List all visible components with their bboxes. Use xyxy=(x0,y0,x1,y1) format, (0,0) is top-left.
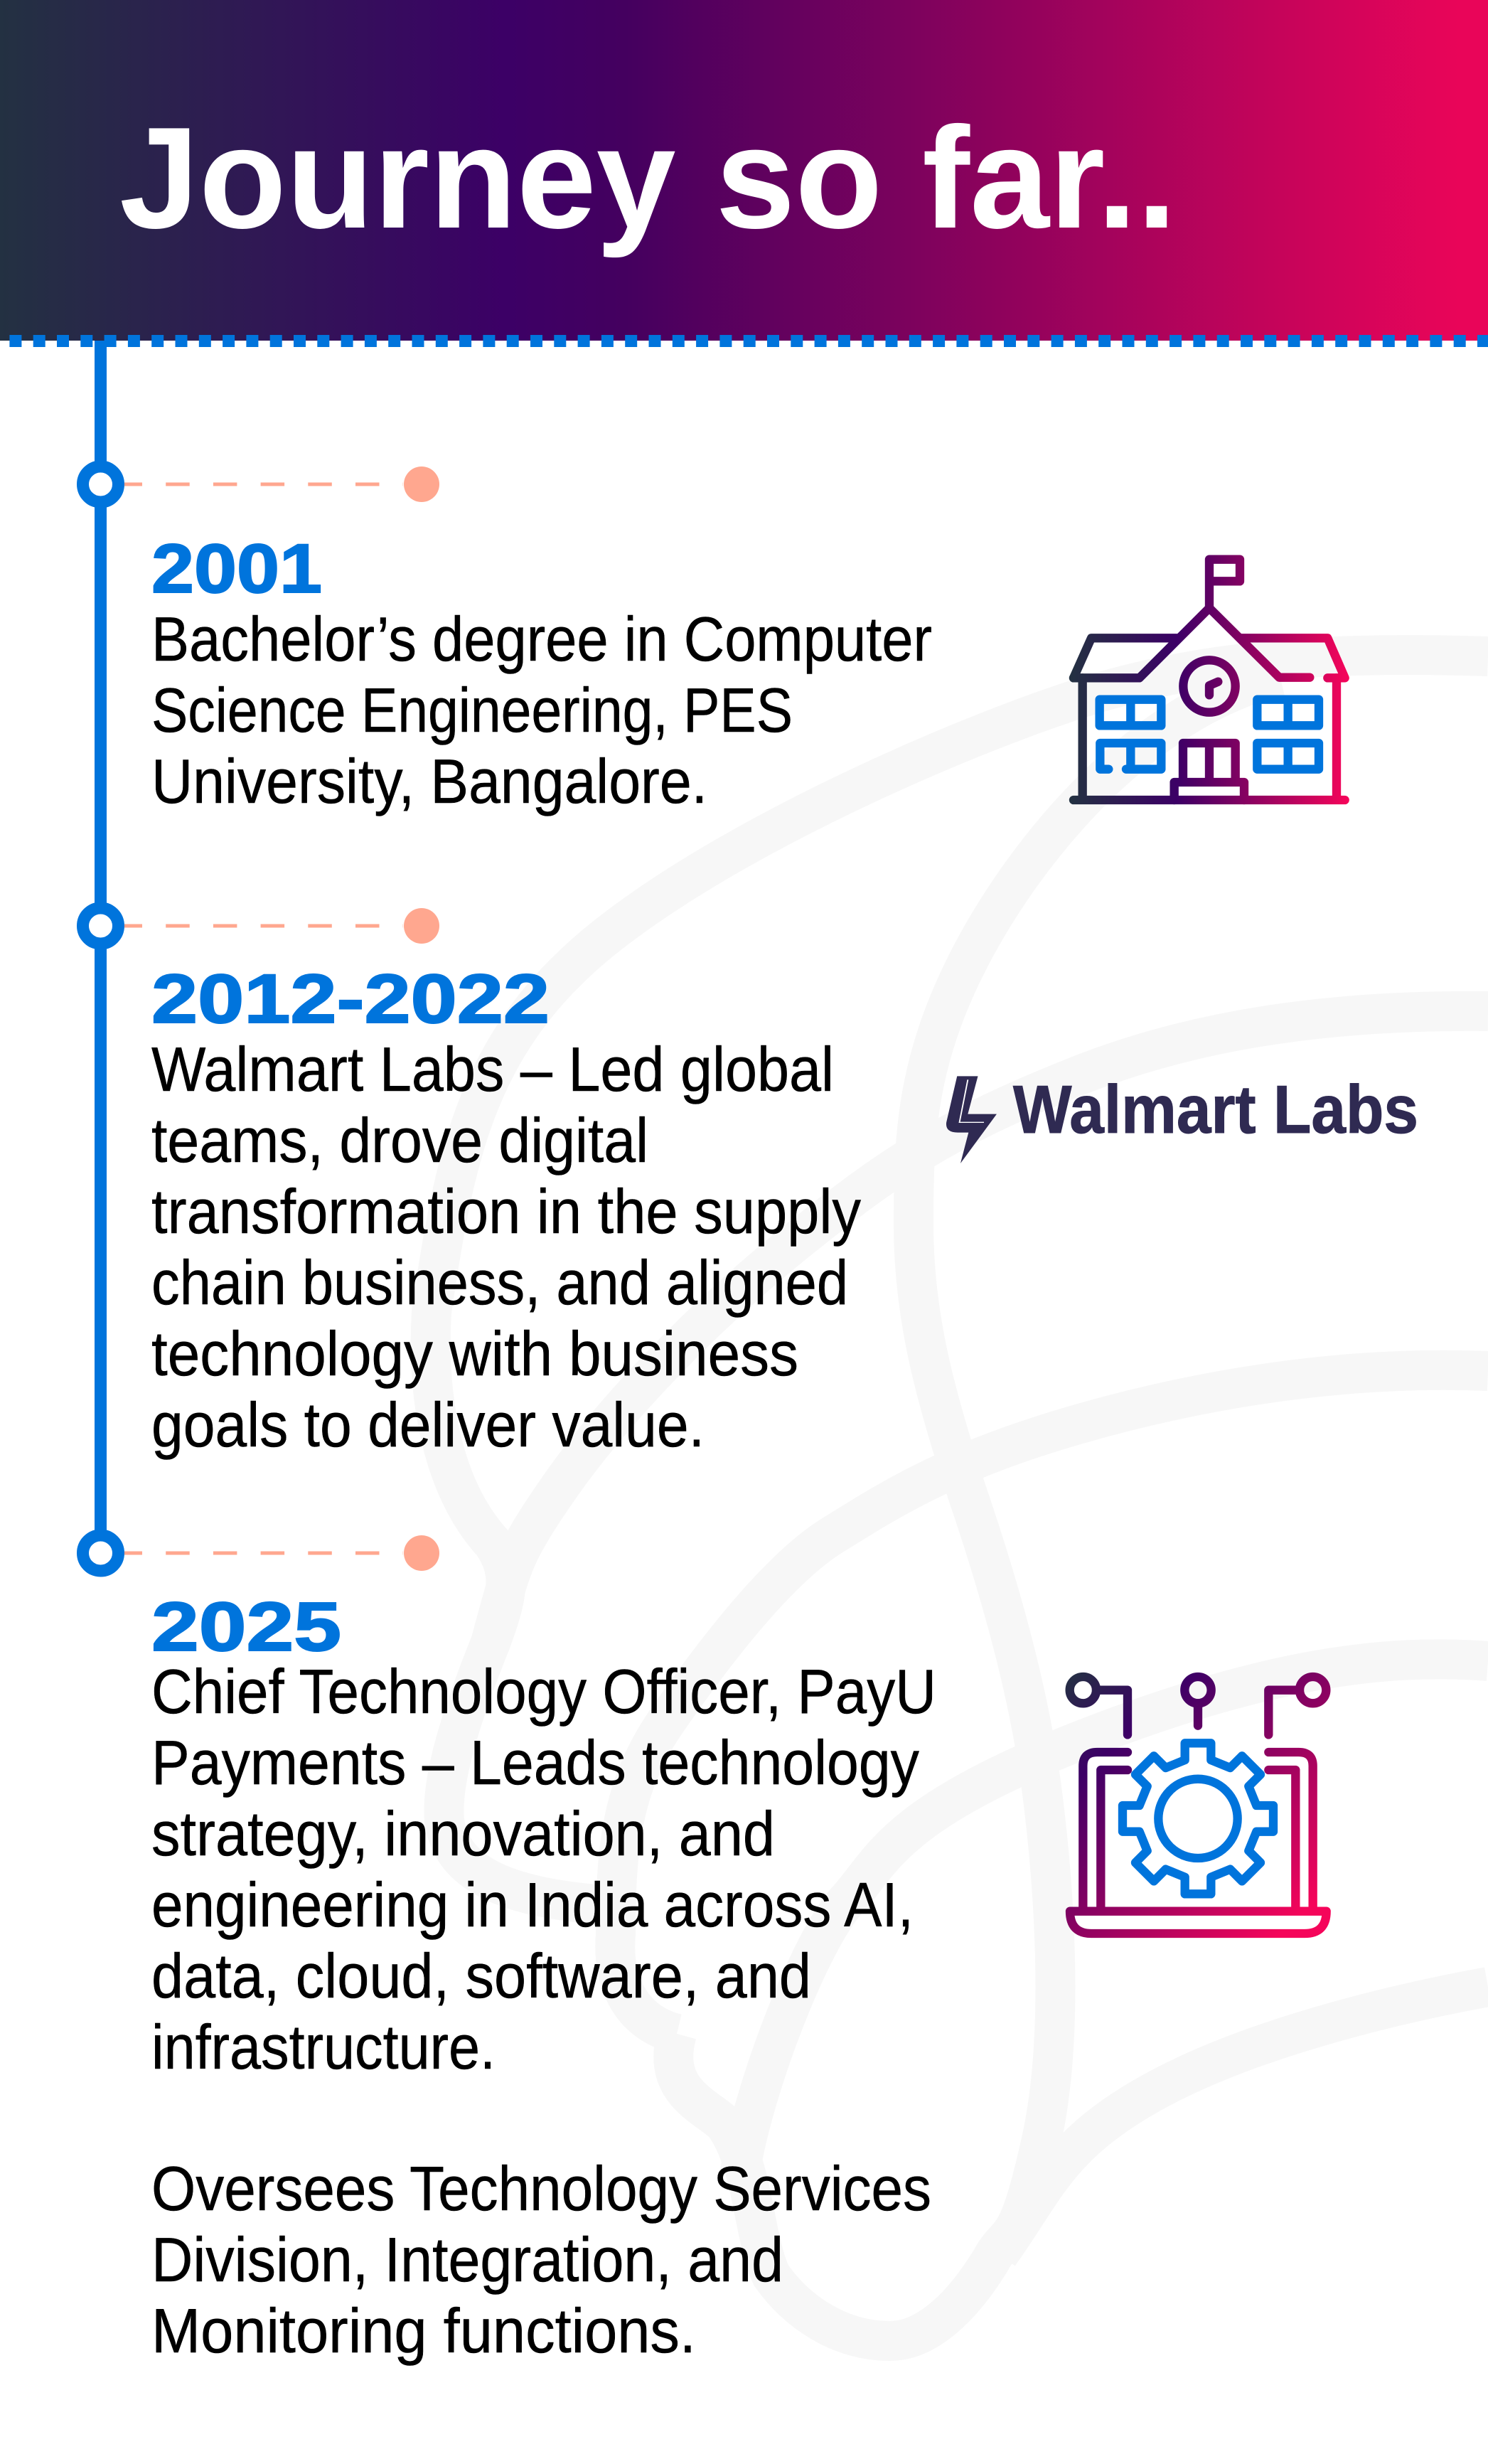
icon: school building xyxy=(1074,560,1345,800)
text: PayU CTO role xyxy=(151,1656,936,2366)
text: PayU CTO role: Monitoring functions. xyxy=(151,2295,696,2366)
text: Walmart Labs role: technology with business xyxy=(151,1318,798,1389)
year 2001: 2001 xyxy=(151,530,322,607)
title: Journey so far.. xyxy=(119,97,1177,259)
text: 2001 education: University, Bangalore. xyxy=(151,746,707,816)
header banner xyxy=(0,0,1488,341)
timeline marker 2025 xyxy=(82,1535,439,1571)
text: Walmart Labs role: goals to deliver value. xyxy=(151,1390,705,1460)
text: PayU CTO role: Oversees Technology Services xyxy=(151,2153,931,2224)
text: PayU CTO role: infrastructure. xyxy=(151,2012,496,2082)
text: PayU CTO role: engineering in India across AI, xyxy=(151,1870,914,1940)
wordmark: Walmart Labs xyxy=(1013,1072,1418,1148)
text: Walmart Labs role: transformation in the supply xyxy=(151,1176,861,1247)
text: PayU CTO role: Division, Integration, and xyxy=(151,2224,783,2295)
year 2012-2022: 2012-2022 xyxy=(151,960,550,1038)
text: 2001 education: Science Engineering, PES xyxy=(151,675,793,745)
timeline marker 2001 xyxy=(82,466,439,502)
text: Walmart Labs role: Walmart Labs – Led global xyxy=(151,1034,834,1104)
text: Walmart Labs role xyxy=(151,1034,861,1460)
icon: laptop with gear xyxy=(1070,1677,1327,1934)
text: PayU CTO role: Chief Technology Officer, PayU xyxy=(151,1656,936,1727)
text: PayU CTO role: strategy, innovation, and xyxy=(151,1798,775,1869)
timeline marker 2012-2022 xyxy=(82,908,439,944)
text: PayU CTO role: Payments – Leads technology xyxy=(151,1727,919,1798)
logo: Walmart Labs xyxy=(946,1072,1418,1163)
dotted header border xyxy=(9,335,1488,347)
text: 2001 education xyxy=(151,604,932,816)
text: Walmart Labs role: teams, drove digital xyxy=(151,1105,648,1175)
text: PayU CTO role: data, cloud, software, and xyxy=(151,1941,811,2011)
text: Walmart Labs role: chain business, and aligned xyxy=(151,1247,848,1318)
timeline vertical line xyxy=(95,341,107,1553)
text: 2001 education: Bachelor’s degree in Computer xyxy=(151,604,932,674)
background watermark xyxy=(431,655,1488,2341)
year 2025: 2025 xyxy=(151,1588,341,1665)
icon: lightning bolt xyxy=(946,1076,997,1163)
